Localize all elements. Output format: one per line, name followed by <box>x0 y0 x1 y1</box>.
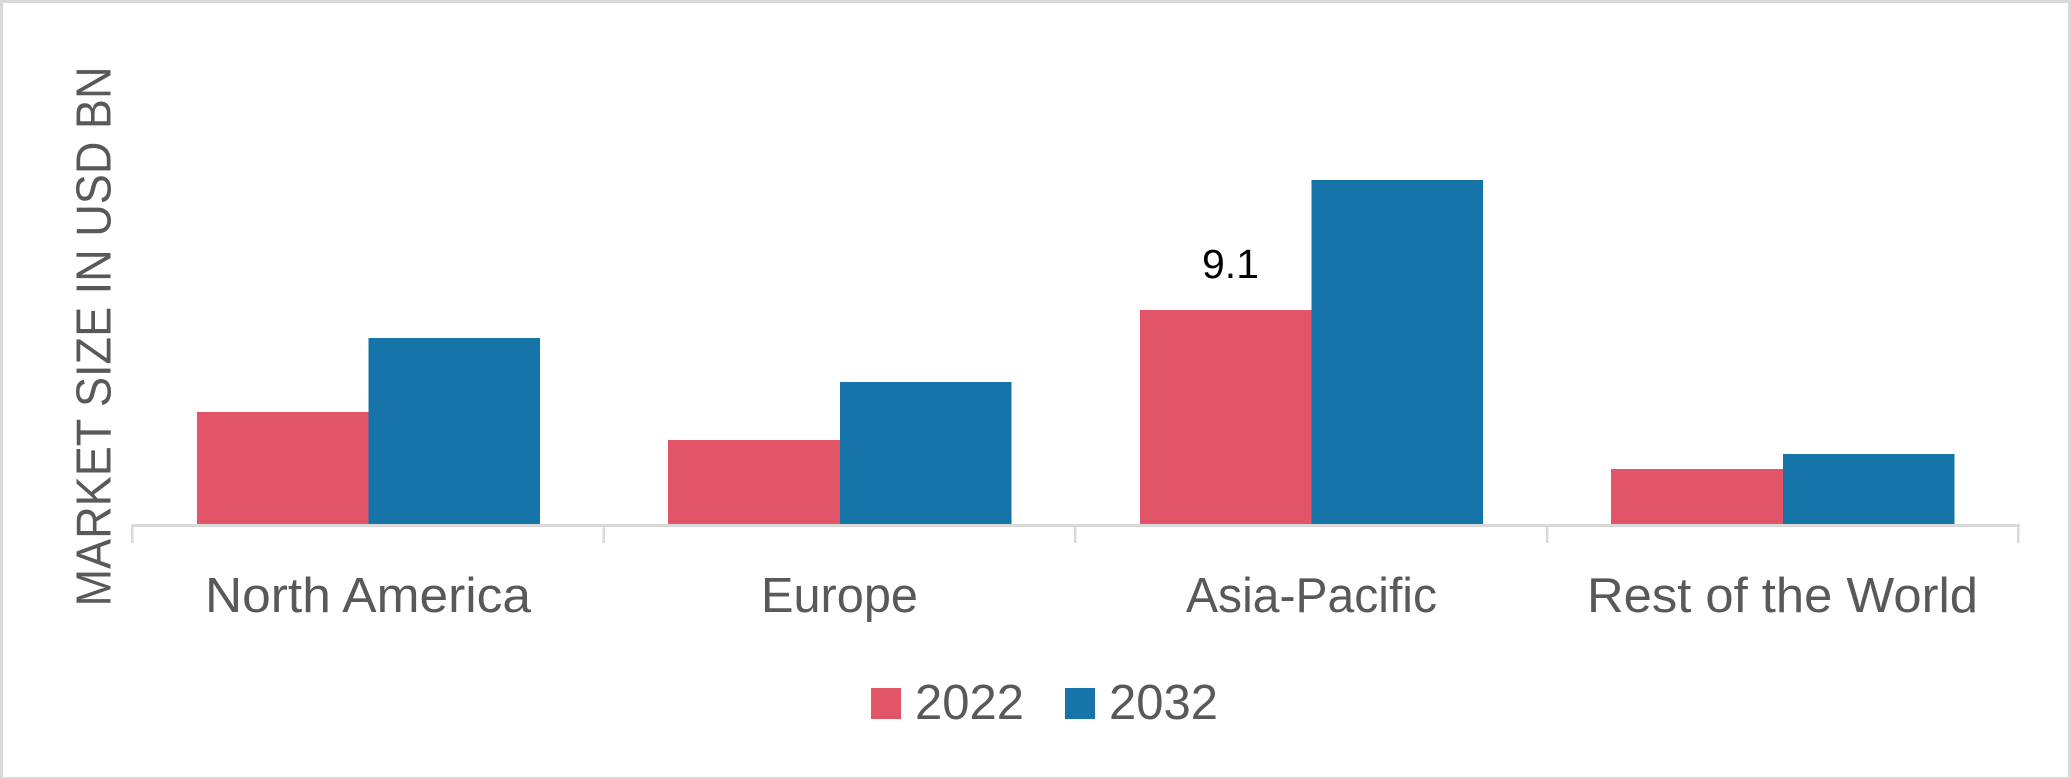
data label: Asia-Pacific 2022: 9.1 <box>1202 241 1259 287</box>
y axis title: MARKET SIZE IN USD BN <box>68 66 122 606</box>
legend label 2032: 2032 <box>1109 676 1218 730</box>
legend swatch 2022 <box>871 688 901 719</box>
category label: North America: North America <box>205 569 532 623</box>
legend <box>871 676 1218 730</box>
bars: Rest of the World <box>1611 454 1954 524</box>
category label: Europe: Europe <box>761 569 918 623</box>
bars: North America <box>197 338 540 524</box>
legend swatch 2032 <box>1065 688 1095 719</box>
bars: Asia-Pacific <box>1140 180 1483 524</box>
legend label 2022: 2022 <box>915 676 1024 730</box>
category label: Rest of the World: Rest of the World <box>1587 569 1978 623</box>
x axis <box>131 524 2020 543</box>
category label: Asia-Pacific: Asia-Pacific <box>1186 569 1437 623</box>
bars: Europe <box>668 382 1012 524</box>
